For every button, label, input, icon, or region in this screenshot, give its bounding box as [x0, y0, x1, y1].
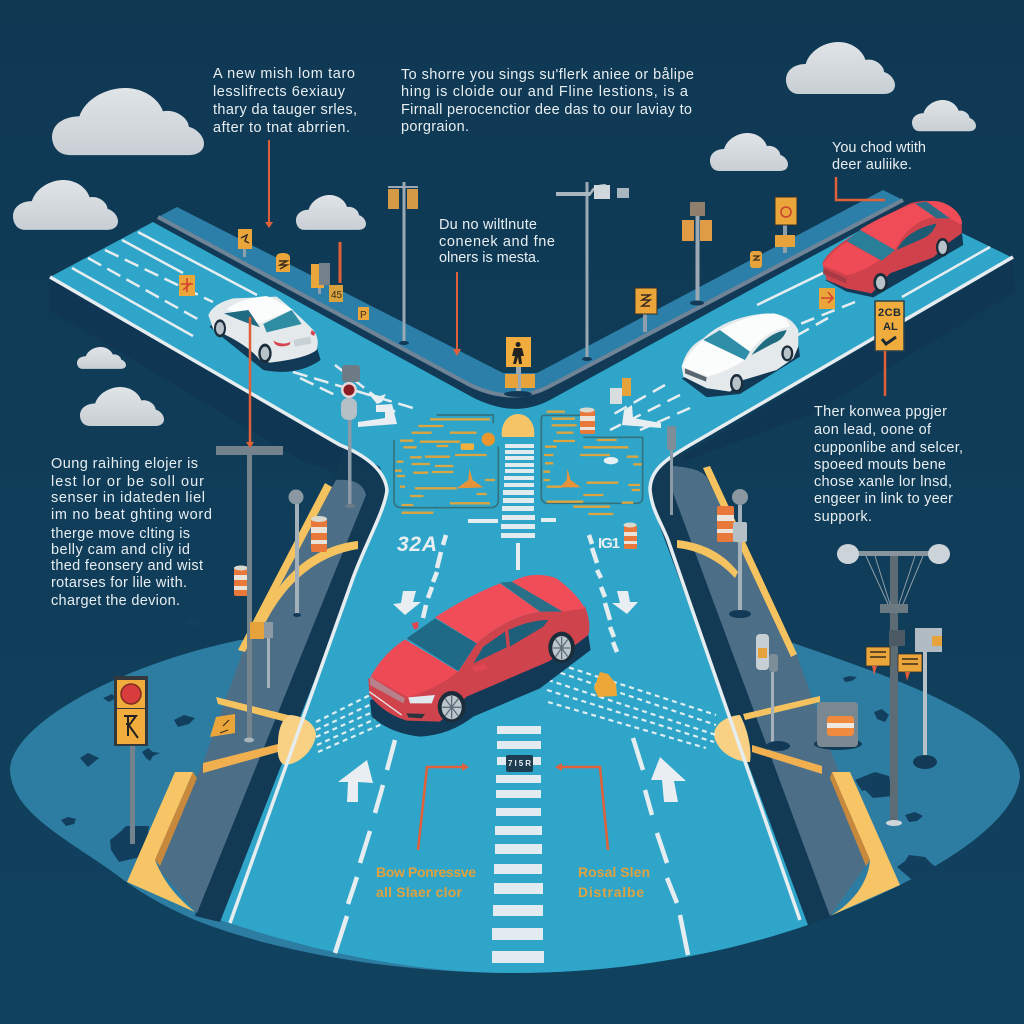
fog lamp [407, 713, 425, 718]
hood [371, 639, 458, 697]
pedestrian icon [512, 342, 524, 364]
shadow [682, 343, 800, 397]
connector bottom right [562, 767, 608, 850]
text block top right: You chod wtith [832, 140, 926, 156]
road markings [50, 232, 1013, 955]
text block right: cupponlibe and selcer, [814, 440, 963, 456]
median dark band [195, 450, 385, 922]
bottom label left: Bow Ponressve [376, 864, 476, 880]
median dark band [650, 450, 832, 925]
text block left: thed feonsery and wist [51, 558, 203, 574]
ground ellipse [10, 640, 1020, 973]
white car right [682, 313, 800, 397]
big speed sign: 2CB [878, 307, 901, 319]
median pavement [672, 466, 870, 916]
parking meter pole [250, 622, 273, 688]
bottom label right: Rosal Slen [578, 864, 650, 880]
callout connector lines [250, 140, 885, 850]
lamp posts upper [388, 182, 712, 361]
hood [682, 340, 745, 377]
wheels [730, 374, 743, 393]
cloud [786, 42, 895, 94]
white car left [208, 296, 321, 372]
big speed sign: AL [883, 321, 898, 333]
headlight [408, 695, 435, 703]
barrel [717, 506, 734, 542]
corner wedge [127, 772, 195, 912]
trunk [927, 201, 962, 225]
bottom label right: Distralbe [578, 884, 644, 900]
ground blobs [61, 618, 941, 879]
dark kerb side [153, 200, 907, 408]
second pole and camera [913, 628, 942, 769]
text block top left: A new mish lom taro [213, 66, 355, 82]
trunk [512, 575, 585, 612]
right arm lanes [757, 247, 990, 305]
corner wedge [830, 772, 900, 916]
text block left: senser in idateden liel [51, 490, 205, 506]
bottom label right [578, 864, 650, 900]
roof [227, 296, 293, 323]
wheels [214, 319, 226, 337]
road signs right arm [610, 197, 904, 404]
left median poles [210, 446, 304, 742]
long kerb [703, 466, 797, 657]
rear wheel [548, 632, 575, 663]
big speed sign [875, 301, 904, 351]
text block left: Oung raìhing elojer is [51, 456, 198, 472]
wheels [873, 273, 888, 292]
sign [775, 197, 797, 253]
right median [650, 450, 870, 925]
connector [456, 272, 458, 350]
barrel [580, 408, 595, 434]
connector [268, 140, 270, 223]
bollard [278, 715, 316, 765]
hood [822, 242, 880, 275]
long kerb [238, 483, 332, 652]
side window [224, 310, 260, 327]
text block top left: lesslifrects 6exiauy [213, 84, 346, 100]
crossing label plate: 7I5R [508, 759, 531, 768]
bollard arms [743, 696, 820, 720]
cloud [52, 88, 204, 155]
equipment box [814, 702, 862, 750]
clouds [13, 42, 976, 426]
grille [823, 268, 847, 283]
sign: P [360, 310, 367, 321]
road marking blob [368, 393, 386, 404]
text block top centre [401, 67, 694, 135]
windshield [407, 618, 477, 671]
small road barrels [610, 378, 631, 404]
text block top centre: Firnall perocenctior dee das to our laviay to [401, 102, 692, 118]
cloud [912, 100, 976, 131]
left arm edge line [50, 277, 387, 923]
side window [752, 330, 787, 355]
shadow [209, 313, 321, 372]
left hatched panel [394, 415, 498, 513]
pole with globe head [729, 489, 751, 618]
sign [635, 288, 657, 332]
cloud [13, 180, 118, 230]
sign [750, 251, 762, 268]
right yellow kerbs [677, 466, 900, 916]
lamp post with signs [682, 202, 712, 306]
text block left [51, 456, 212, 609]
barrel [624, 522, 637, 549]
text block right: engeer in link to yeer [814, 491, 953, 507]
text block top left: thary da tauger srles, [213, 102, 357, 118]
text block centre: conenek and fne [439, 234, 555, 250]
hanging signs [866, 647, 922, 681]
direction arrows [338, 591, 686, 802]
connector [836, 177, 885, 200]
lower zebra crossing [492, 726, 544, 963]
text block top right: deer auliike. [832, 157, 912, 173]
shadow [825, 230, 963, 297]
text block left: charget the devion. [51, 593, 180, 609]
body [822, 201, 962, 293]
arrow down right [612, 591, 638, 614]
road surface [50, 205, 1013, 973]
text block centre: olners is mesta. [439, 250, 540, 266]
arrow up left [338, 760, 373, 802]
connector [249, 317, 251, 442]
lamp post centre [556, 182, 629, 361]
front wheel [438, 691, 466, 722]
main red car [368, 575, 591, 737]
text block top left [213, 66, 357, 136]
sign [276, 253, 290, 272]
sign [238, 229, 252, 257]
sign [358, 307, 369, 321]
right hatched panel [541, 412, 643, 514]
right arm edge line [650, 257, 1013, 920]
right median poles [729, 489, 862, 751]
bollard arms [216, 697, 292, 723]
curved kerb [258, 541, 358, 630]
windshield [847, 230, 895, 261]
roof [435, 583, 540, 643]
roof [720, 313, 790, 352]
sidewalk strip [158, 190, 903, 396]
arrow up right [651, 757, 686, 802]
tilted sign support [220, 720, 229, 733]
rear window [263, 310, 302, 332]
shadow [370, 635, 591, 737]
text block right: spoeed mouts bene [814, 457, 946, 473]
text block top right [832, 140, 926, 173]
cloud [296, 195, 366, 230]
text block top left: after to tnat abrrien. [213, 120, 350, 136]
lower left lane dashes [335, 535, 446, 953]
road number right: IG1 [598, 535, 620, 552]
curved kerb [677, 540, 738, 578]
text block left: im no beat ghting word [51, 507, 212, 523]
tilted sign [210, 714, 235, 737]
grille [370, 677, 405, 703]
angle arrow left [358, 404, 397, 427]
body [208, 297, 318, 363]
sign on road [179, 275, 195, 296]
cloud [710, 133, 788, 171]
rear window [500, 582, 563, 612]
text block left: rotarses for lile with. [51, 575, 187, 591]
crossing label plate [506, 755, 533, 772]
text block left: therge move clting is [51, 526, 190, 542]
body side [368, 607, 589, 722]
angle arrow right [622, 405, 661, 428]
connector [884, 351, 886, 396]
cloud [80, 387, 164, 426]
side window [897, 223, 937, 250]
median pavement [158, 480, 366, 913]
body [682, 313, 798, 392]
arrow down left [393, 591, 421, 615]
windshield [703, 330, 750, 360]
connector [338, 242, 342, 283]
text block right: Ther konwea ppgjer [814, 404, 947, 420]
sign [311, 263, 330, 294]
upper zebra crossing [501, 444, 535, 538]
double street lamp [837, 544, 950, 826]
lamp post left [388, 182, 418, 345]
bollard [714, 715, 751, 762]
text block right: aon lead, oone of [814, 422, 932, 438]
sign glyph [124, 716, 138, 738]
bottom label left: all Slaer clor [376, 884, 463, 900]
sign on road [819, 288, 835, 309]
left arm lanes [72, 232, 257, 336]
plate [293, 337, 312, 347]
dotted fan right [547, 662, 716, 748]
sign [329, 285, 343, 302]
short pole [288, 490, 304, 617]
stacked sign left [114, 676, 148, 844]
camera pole right [667, 426, 676, 515]
small yellow marker [594, 672, 617, 697]
tall lamp with top bar [216, 446, 283, 742]
text block top centre: To shorre you sings su'flerk aniee or bålipe [401, 67, 694, 83]
text block centre [439, 217, 555, 266]
text block left: belly cam and cliy id [51, 542, 190, 558]
text block right: chose xanle lor lnsd, [814, 474, 952, 490]
barrel [234, 566, 248, 596]
text block right [814, 404, 963, 525]
traffic light [341, 365, 360, 508]
text block right: suppork. [814, 509, 872, 525]
text block top centre: porgraion. [401, 119, 469, 135]
bottom label left [376, 864, 476, 900]
text block left: lest lor or be soll our [51, 474, 204, 490]
tail lights [273, 330, 315, 346]
connector bottom left [418, 767, 462, 850]
pedestrian sign [504, 337, 535, 397]
rear window [915, 202, 952, 218]
mirrors [412, 622, 487, 672]
centre dome [502, 414, 534, 437]
left yellow kerbs [127, 483, 358, 912]
cylinder [756, 634, 769, 670]
barrel [311, 516, 327, 552]
red car right [822, 201, 963, 297]
cloud [77, 347, 126, 369]
side windows [473, 620, 548, 663]
meter pole [766, 654, 790, 751]
barrels [234, 408, 734, 596]
text block centre: Du no wiltlnute [439, 217, 537, 233]
dotted fan left [316, 690, 382, 752]
upper kerb strip [153, 190, 907, 408]
grille [685, 368, 707, 382]
roof [860, 203, 937, 250]
road signs left arm [179, 229, 369, 321]
arrow heads [246, 222, 562, 771]
road side shadows [50, 258, 1014, 490]
centre dash [468, 520, 556, 570]
left median [158, 450, 385, 922]
text block top centre: hing is cloide our and Fline lestions, is a [401, 84, 689, 100]
lower right lane dashes [589, 535, 688, 955]
grey kerb [158, 200, 903, 396]
road number left: 32A [397, 533, 437, 556]
sign: 45 [331, 290, 343, 301]
